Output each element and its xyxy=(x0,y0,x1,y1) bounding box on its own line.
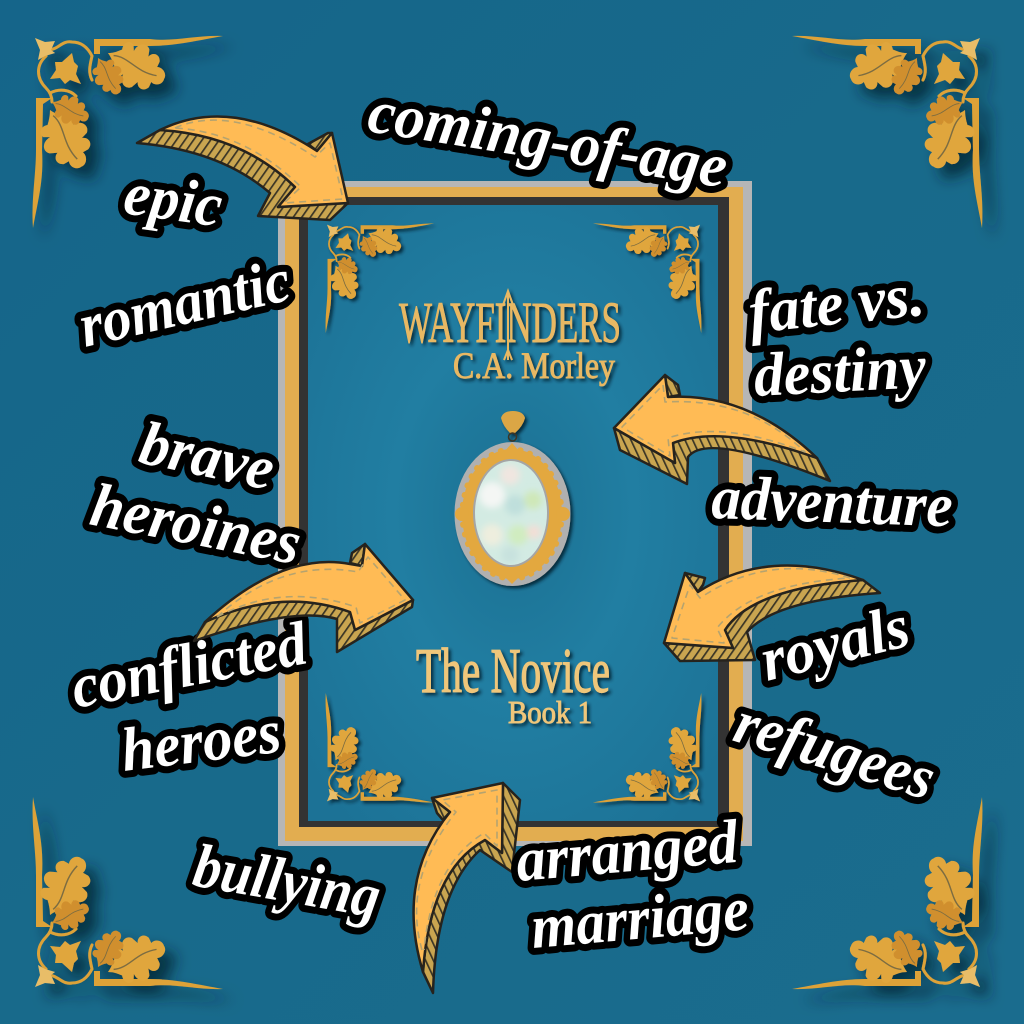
title: Wayfinders: WAYFINDERS xyxy=(399,290,621,355)
ornament: cover top-left xyxy=(324,221,434,333)
label: conflicted: conflicted xyxy=(66,609,313,722)
ornament: cover bottom-right xyxy=(593,693,703,805)
label: arranged: arranged xyxy=(513,808,741,895)
arrow: lower right pointing to book xyxy=(664,566,880,661)
pendant gold frame xyxy=(455,443,570,584)
label: brave: brave xyxy=(134,409,280,504)
ornament: bottom-left corner xyxy=(29,797,223,993)
ornament: cover top-right xyxy=(593,221,703,333)
book title: The Novice: The Novice xyxy=(416,635,610,706)
label: refugees: refugees xyxy=(727,688,943,813)
pendant opal stone xyxy=(473,459,549,567)
icon: opal pendant xyxy=(454,411,570,586)
arrow: top-left pointing to book xyxy=(137,117,348,220)
label: bullying: bullying xyxy=(189,832,386,931)
label: marriage: marriage xyxy=(528,875,751,962)
label: fate vs.: fate vs. xyxy=(745,261,927,347)
label: coming-of-age: coming-of-age xyxy=(364,78,732,201)
title: Wayfinders xyxy=(399,290,621,360)
subtitle: Book 1: Book 1 xyxy=(508,694,592,730)
label: heroes: heroes xyxy=(117,698,285,785)
ornament: cover bottom-left xyxy=(324,693,434,805)
author: C.A. Morley: C.A. Morley xyxy=(453,346,615,387)
label: romantic: romantic xyxy=(73,246,297,361)
label: destiny: destiny xyxy=(752,333,928,410)
label: royals: royals xyxy=(754,592,916,695)
label: adventure: adventure xyxy=(711,464,954,540)
label: heroines: heroines xyxy=(85,471,306,578)
pendant silver backing xyxy=(454,442,570,586)
arrow: upper right pointing to book xyxy=(614,375,830,484)
panel: book cover xyxy=(278,181,752,846)
arrow: bottom pointing to book xyxy=(414,783,520,993)
ornament: top-right corner xyxy=(792,32,986,228)
ornament: bottom-right corner xyxy=(792,797,986,993)
arrow: left pointing to book xyxy=(194,544,413,652)
label: epic: epic xyxy=(120,160,227,241)
ornament: top-left corner xyxy=(29,32,223,228)
pendant bail xyxy=(501,411,525,441)
